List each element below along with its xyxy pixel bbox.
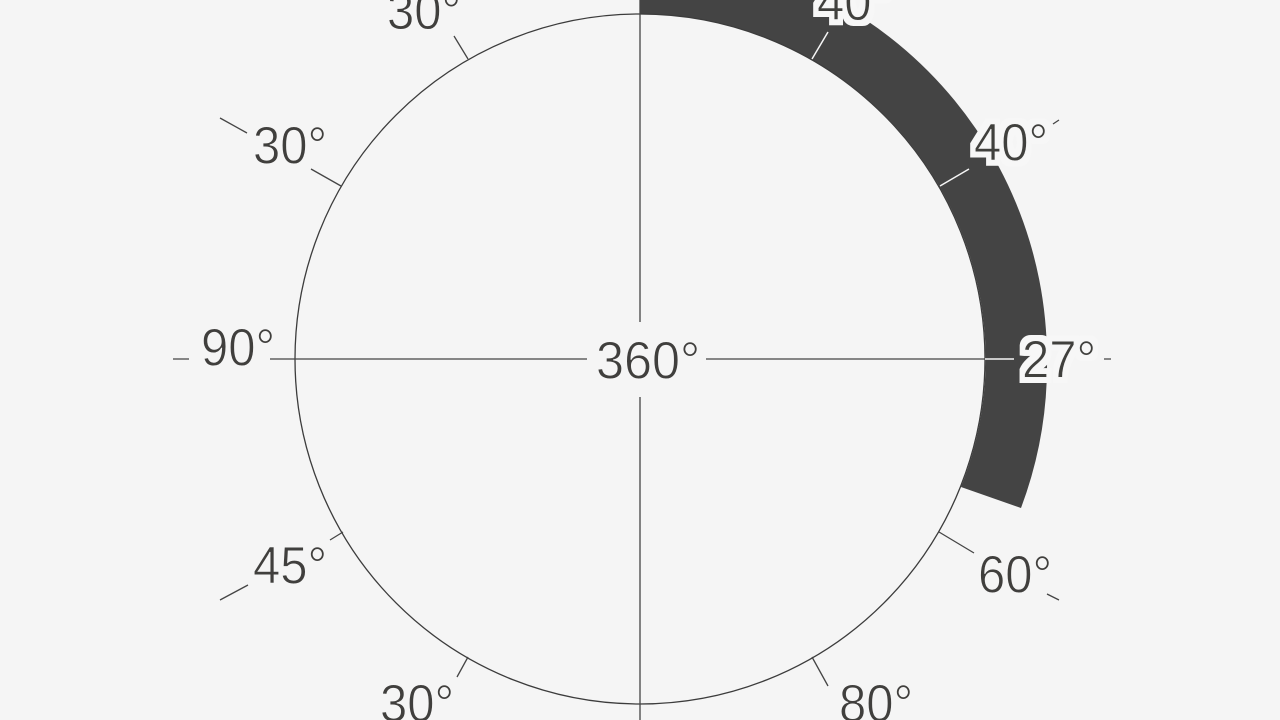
label: 90 degrees left: 90° bbox=[201, 318, 275, 377]
label: 360 degrees centre: 360° bbox=[596, 330, 700, 390]
label: 27 degrees right: 27° bbox=[1022, 330, 1096, 389]
crosshair lines bbox=[270, 0, 1014, 720]
label: 60 degrees lower right: 60° bbox=[978, 545, 1052, 604]
label: 45 degrees lower left: 45° bbox=[253, 536, 327, 595]
tick marks bbox=[173, 32, 1111, 686]
main circle bbox=[295, 14, 985, 704]
label: 40 degrees upper right: 40° bbox=[974, 113, 1048, 172]
label: 30 degrees upper left: 30° bbox=[253, 116, 327, 175]
dark arc segment bbox=[640, 0, 1047, 508]
